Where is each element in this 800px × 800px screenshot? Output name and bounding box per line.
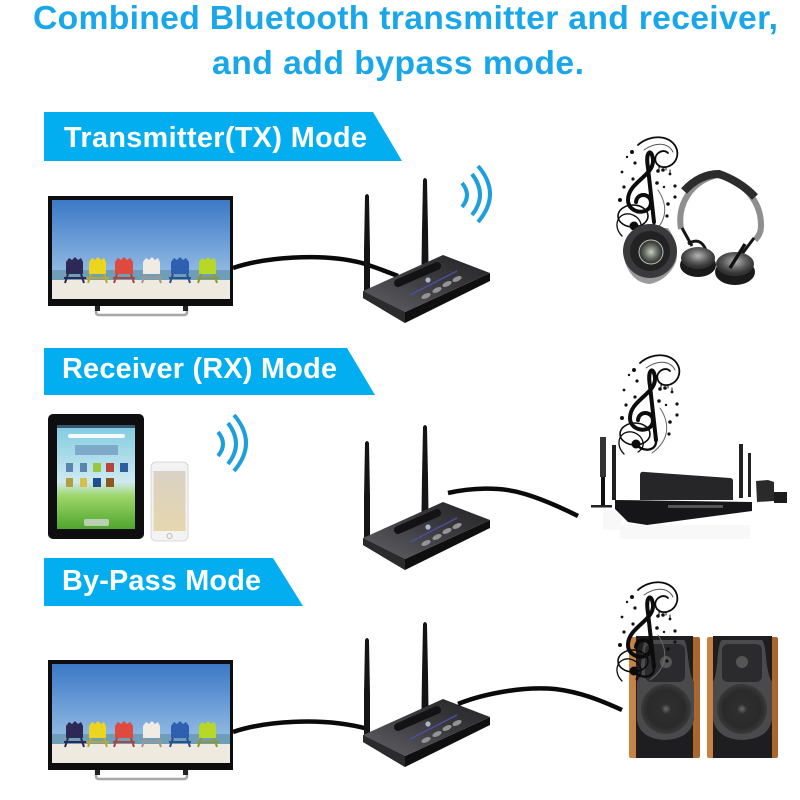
- banner: Receiver (RX) Mode: [44, 348, 375, 395]
- cable: TV to transmitter: [233, 257, 398, 276]
- headphones: [680, 174, 761, 285]
- banner: Transmitter(TX) Mode: [44, 112, 402, 161]
- music clef: receiver: [619, 355, 679, 454]
- music clef: transmitter: [617, 137, 677, 236]
- TV: transmitter mode: [48, 196, 233, 315]
- tablet: [48, 414, 144, 539]
- home theater system: [591, 437, 787, 539]
- title: Combined Bluetooth transmitter and receiver,: [33, 0, 778, 37]
- banner: Transmitter(TX) Mode: Transmitter(TX) Mode: [64, 122, 367, 154]
- device: transmitter: [363, 178, 490, 323]
- cable: TV to bypass device: [233, 722, 368, 732]
- bookshelf speakers: [629, 636, 778, 758]
- icon: wireless waves receiver: [218, 415, 246, 471]
- right speaker: [707, 636, 778, 758]
- banner: By-Pass Mode: By-Pass Mode: [62, 565, 261, 597]
- banner: Receiver (RX) Mode: Receiver (RX) Mode: [62, 353, 337, 385]
- left speaker: [629, 636, 700, 758]
- icon: wireless waves transmitter: [462, 166, 490, 222]
- title: [33, 0, 778, 82]
- cable: receiver to home theater: [448, 489, 578, 516]
- title: and add bypass mode.: [212, 44, 584, 82]
- cable: bypass device to speakers: [458, 688, 622, 710]
- phone: [151, 462, 188, 541]
- device: receiver: [363, 425, 490, 570]
- TV: bypass mode: [48, 660, 233, 779]
- round speaker: [623, 224, 677, 284]
- device: bypass: [363, 622, 490, 767]
- banner: By-Pass Mode: [44, 558, 303, 606]
- music clef: bypass: [617, 582, 677, 681]
